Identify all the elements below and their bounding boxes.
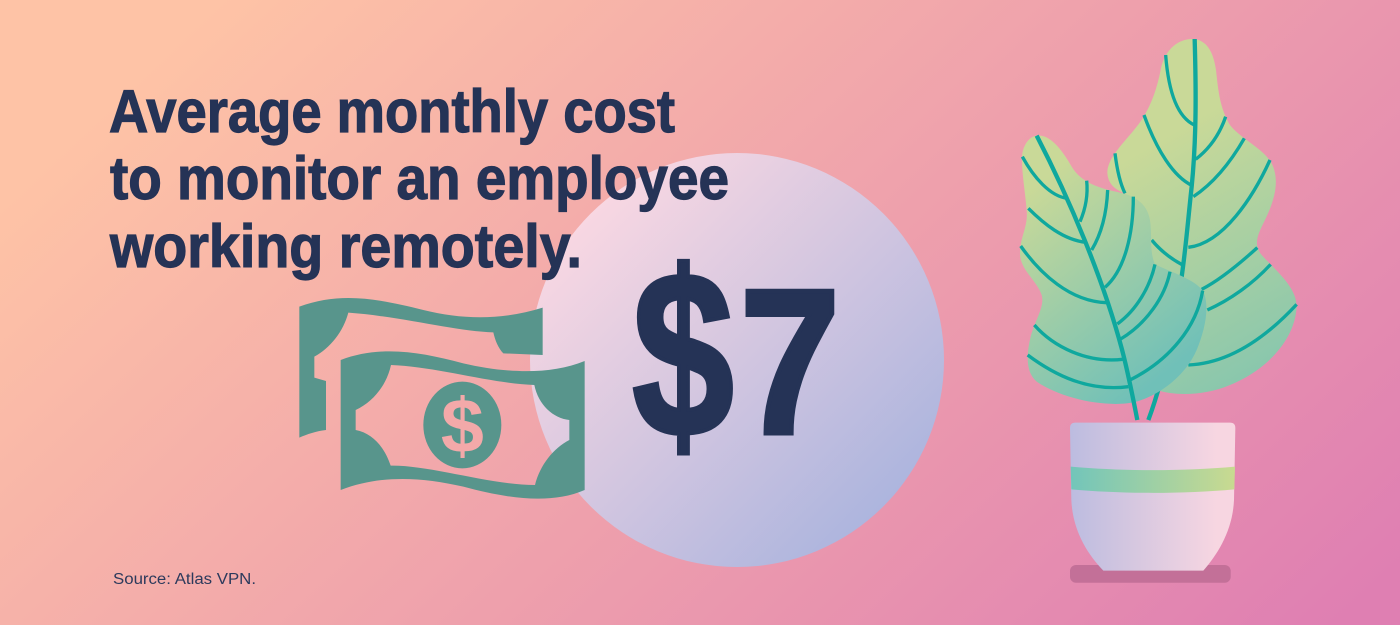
price value: $ [632,223,734,487]
pot band [1071,467,1235,493]
title: to monitor an employee [110,145,729,212]
circle behind price [530,153,944,567]
icon: dollar sign on coin: $ [441,383,484,469]
illustration: potted plant [1020,39,1297,583]
plant leaves [1020,39,1297,420]
pot shadow [1070,565,1231,583]
back leaf [1107,39,1297,420]
icon: front banknote [341,351,585,499]
price value: 7 [740,247,840,477]
title: Average monthly cost [109,78,675,145]
price value [632,223,840,487]
title: working remotely. [109,213,582,280]
pot body [1070,423,1235,571]
icon: banknotes [299,298,585,499]
icon: coin [423,382,501,468]
plant pot [1070,423,1235,571]
icon: back banknote [299,298,543,438]
title [109,78,729,280]
source note: Source: Atlas VPN. [113,571,256,588]
front leaf [1020,135,1206,420]
